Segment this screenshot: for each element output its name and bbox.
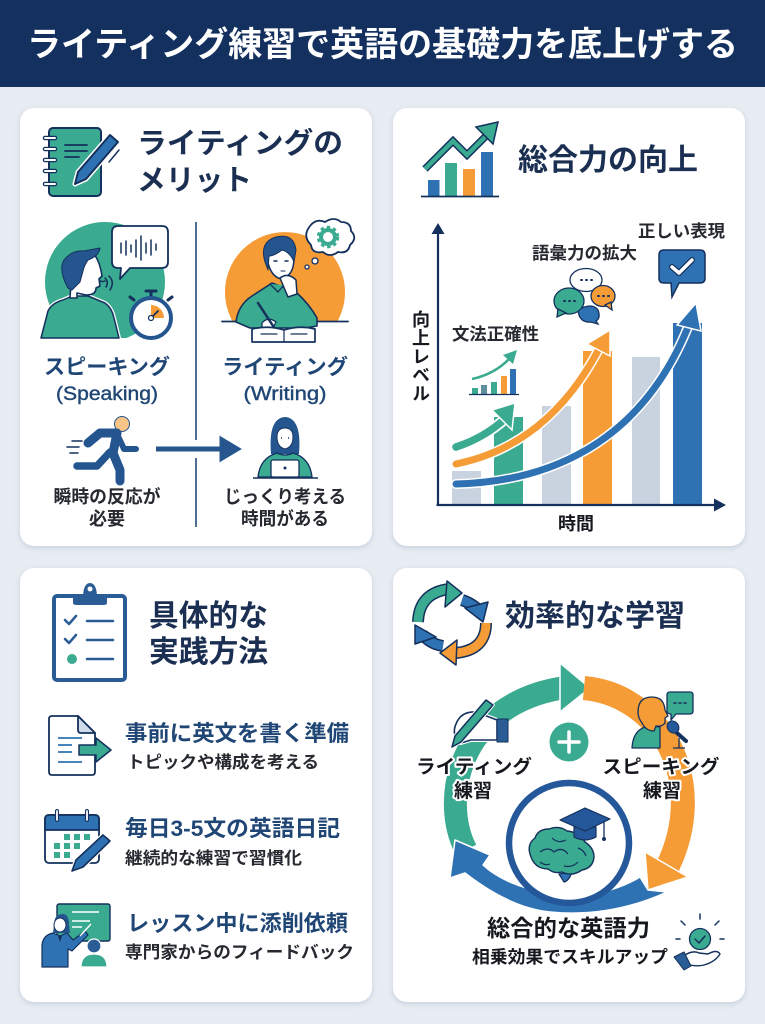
label: speaking: [44, 355, 170, 405]
arc: blue: [450, 840, 667, 913]
label: writing practice: 練習: [454, 780, 492, 802]
arrow: expression curve: [456, 303, 701, 484]
icon: document with arrow: [49, 716, 111, 775]
label: speaking: スピーキング: [44, 355, 170, 379]
title banner: [0, 0, 765, 87]
icon: mini chart: [469, 350, 519, 394]
icon: stopwatch: [130, 291, 172, 338]
heading: 効率的な学習: [505, 600, 685, 633]
center circle: [509, 783, 629, 903]
result text: [472, 915, 669, 967]
heading: ライティングの: [137, 127, 343, 160]
description: 専門家からのフィードバック: [125, 942, 354, 962]
title: 事前に英文を書く準備: [125, 721, 349, 746]
arc: orange: [584, 688, 688, 890]
arrow: vocabulary curve: [456, 330, 610, 464]
label: writing practice: ライティング: [416, 755, 532, 778]
description: トピックや構成を考える: [127, 752, 319, 772]
arrow: grammar curve: [456, 403, 515, 447]
heading: [149, 600, 268, 669]
label: writing: (Writing): [244, 384, 326, 405]
icon: hand holding pen: [452, 700, 508, 747]
icon: running person: [67, 416, 136, 481]
caption: speaking: [54, 486, 160, 529]
label: writing practice: [416, 755, 532, 802]
divider: [195, 222, 197, 527]
label: speaking practice: [602, 755, 720, 802]
arc: teal: [455, 663, 590, 850]
plus sign: [550, 722, 588, 762]
title: 毎日3-5文の英語日記: [125, 816, 340, 841]
arrow: speaking to writing: [156, 440, 237, 458]
icon: speaker with microphone: [632, 692, 693, 748]
icon: notebook and pen: [45, 128, 119, 196]
caption: writing: 時間がある: [241, 508, 329, 529]
axis label: vertical: 向上レベル: [410, 310, 430, 402]
item: prepare: [49, 716, 349, 775]
label: speaking: (Speaking): [56, 384, 158, 405]
heading: 総合力の向上: [518, 144, 698, 177]
label: speaking practice: 練習: [643, 780, 681, 802]
result text: 相乗効果でスキルアップ: [472, 947, 669, 967]
title: レッスン中に添削依頼: [127, 911, 348, 936]
item: diary: [45, 811, 340, 871]
icon: growth chart: [421, 122, 499, 196]
icon: brain with graduation cap: [529, 808, 610, 882]
cycle diagram: [416, 663, 720, 913]
description: 継続的な練習で習慣化: [125, 849, 302, 868]
bar chart: improvement over time: [432, 223, 726, 512]
icon: thought cloud with gear: [305, 219, 354, 269]
item: correction: [42, 904, 354, 967]
label: expression: 正しい表現: [638, 222, 725, 241]
panel: ライティングのメリット: [20, 108, 372, 546]
axes: [432, 223, 726, 512]
illustration: speaking person: [41, 222, 168, 342]
axis label: horizontal: 時間: [558, 514, 594, 534]
label: vocabulary: 語彙力の拡大: [532, 244, 637, 263]
caption: writing: じっくり考える: [224, 487, 346, 507]
heading: メリット: [137, 165, 252, 197]
panel: 効率的な学習: [393, 568, 745, 1002]
label: speaking practice: スピーキング: [602, 755, 720, 778]
illustration: writing person: [222, 232, 348, 342]
panel: 具体的な実践方法: [20, 568, 372, 1002]
caption: speaking: 必要: [89, 509, 125, 529]
label: writing: [222, 355, 348, 405]
icon: check bubble: [659, 250, 705, 297]
icon: cycle arrows: [415, 581, 488, 665]
label: grammar: 文法正確性: [452, 325, 539, 344]
caption: speaking: 瞬時の反応が: [54, 486, 160, 507]
icon: clipboard checklist: [54, 583, 125, 680]
icon: teacher with board: [42, 904, 110, 967]
icon: calendar with pen: [45, 811, 110, 871]
caption: writing: [224, 487, 346, 529]
heading: 実践方法: [149, 636, 268, 669]
icon: speech bubbles: [554, 268, 615, 324]
label: writing: ライティング: [222, 355, 348, 379]
panel: 総合力の向上: [393, 108, 745, 546]
icon: person at laptop: [253, 417, 318, 478]
heading: 具体的な: [149, 600, 268, 633]
title banner: ライティング練習で英語の基礎力を底上げする: [27, 26, 738, 64]
icon: hand holding check bulb: [674, 914, 724, 970]
result text: 総合的な英語力: [487, 915, 650, 941]
heading: [137, 127, 343, 197]
